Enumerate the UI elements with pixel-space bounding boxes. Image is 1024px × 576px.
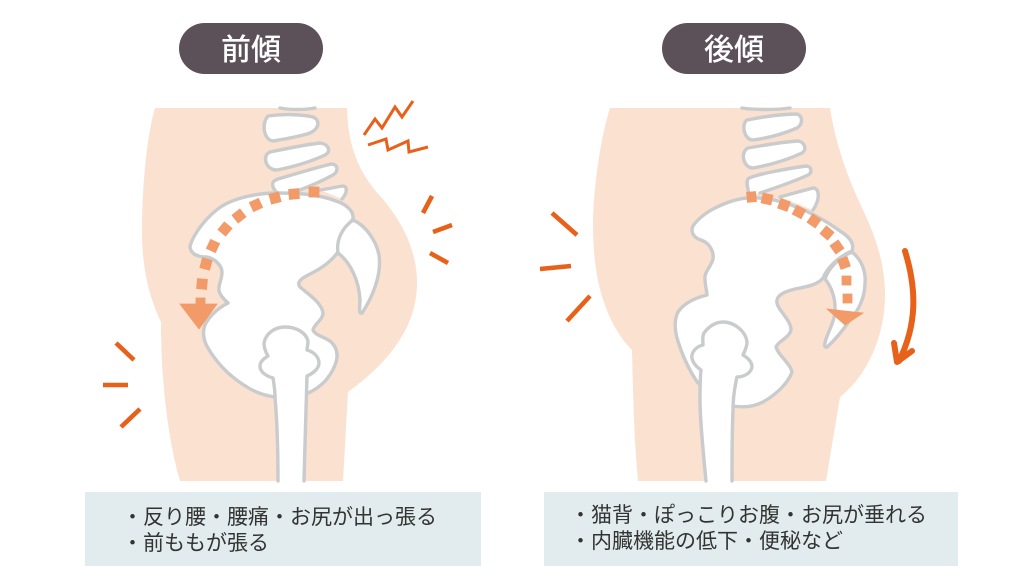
text block: anterior tilt symptoms: ・反り腰・腰痛・お尻が出っ張る: [122, 506, 437, 529]
dotted arrow: backward pelvic rotation: [747, 192, 863, 325]
heading: anterior tilt: 前傾: [221, 34, 281, 67]
pelvis and spine: posterior tilt: [675, 108, 865, 481]
pelvis and spine: anterior tilt: [190, 108, 380, 481]
text block: posterior tilt symptoms: [544, 492, 958, 566]
heading: posterior tilt: [662, 23, 806, 74]
text block: posterior tilt symptoms: ・猫背・ぽっこりお腹・お尻が垂れる: [570, 504, 927, 527]
heading: anterior tilt: [179, 23, 323, 74]
pelvis: [190, 193, 353, 397]
sacrum: [338, 220, 380, 313]
vertebrae: [742, 108, 818, 210]
icon: buttock emphasis ticks: [423, 196, 452, 263]
femur: [260, 327, 319, 481]
vertebrae: [264, 108, 346, 199]
icon: thigh emphasis ticks: [103, 343, 140, 427]
icon: back emphasis ticks: [540, 213, 590, 321]
body silhouette: posterior tilt: [593, 108, 885, 481]
sacrum: [825, 252, 865, 347]
panel: anterior tilt: [85, 23, 481, 566]
dotted arrow: forward pelvic rotation: [180, 187, 319, 329]
heading: posterior tilt: 後傾: [704, 34, 764, 67]
panel: posterior tilt: [540, 23, 958, 566]
body silhouette: anterior tilt: [142, 108, 417, 481]
icon: lower back pain zigzags: [364, 101, 428, 152]
femur: [692, 322, 752, 481]
text block: anterior tilt symptoms: [85, 492, 481, 566]
pelvis: [675, 198, 853, 407]
arrow: buttock sagging downward: [894, 251, 913, 362]
text block: posterior tilt symptoms: ・内臓機能の低下・便秘など: [570, 530, 843, 553]
text block: anterior tilt symptoms: ・前ももが張る: [122, 532, 269, 555]
